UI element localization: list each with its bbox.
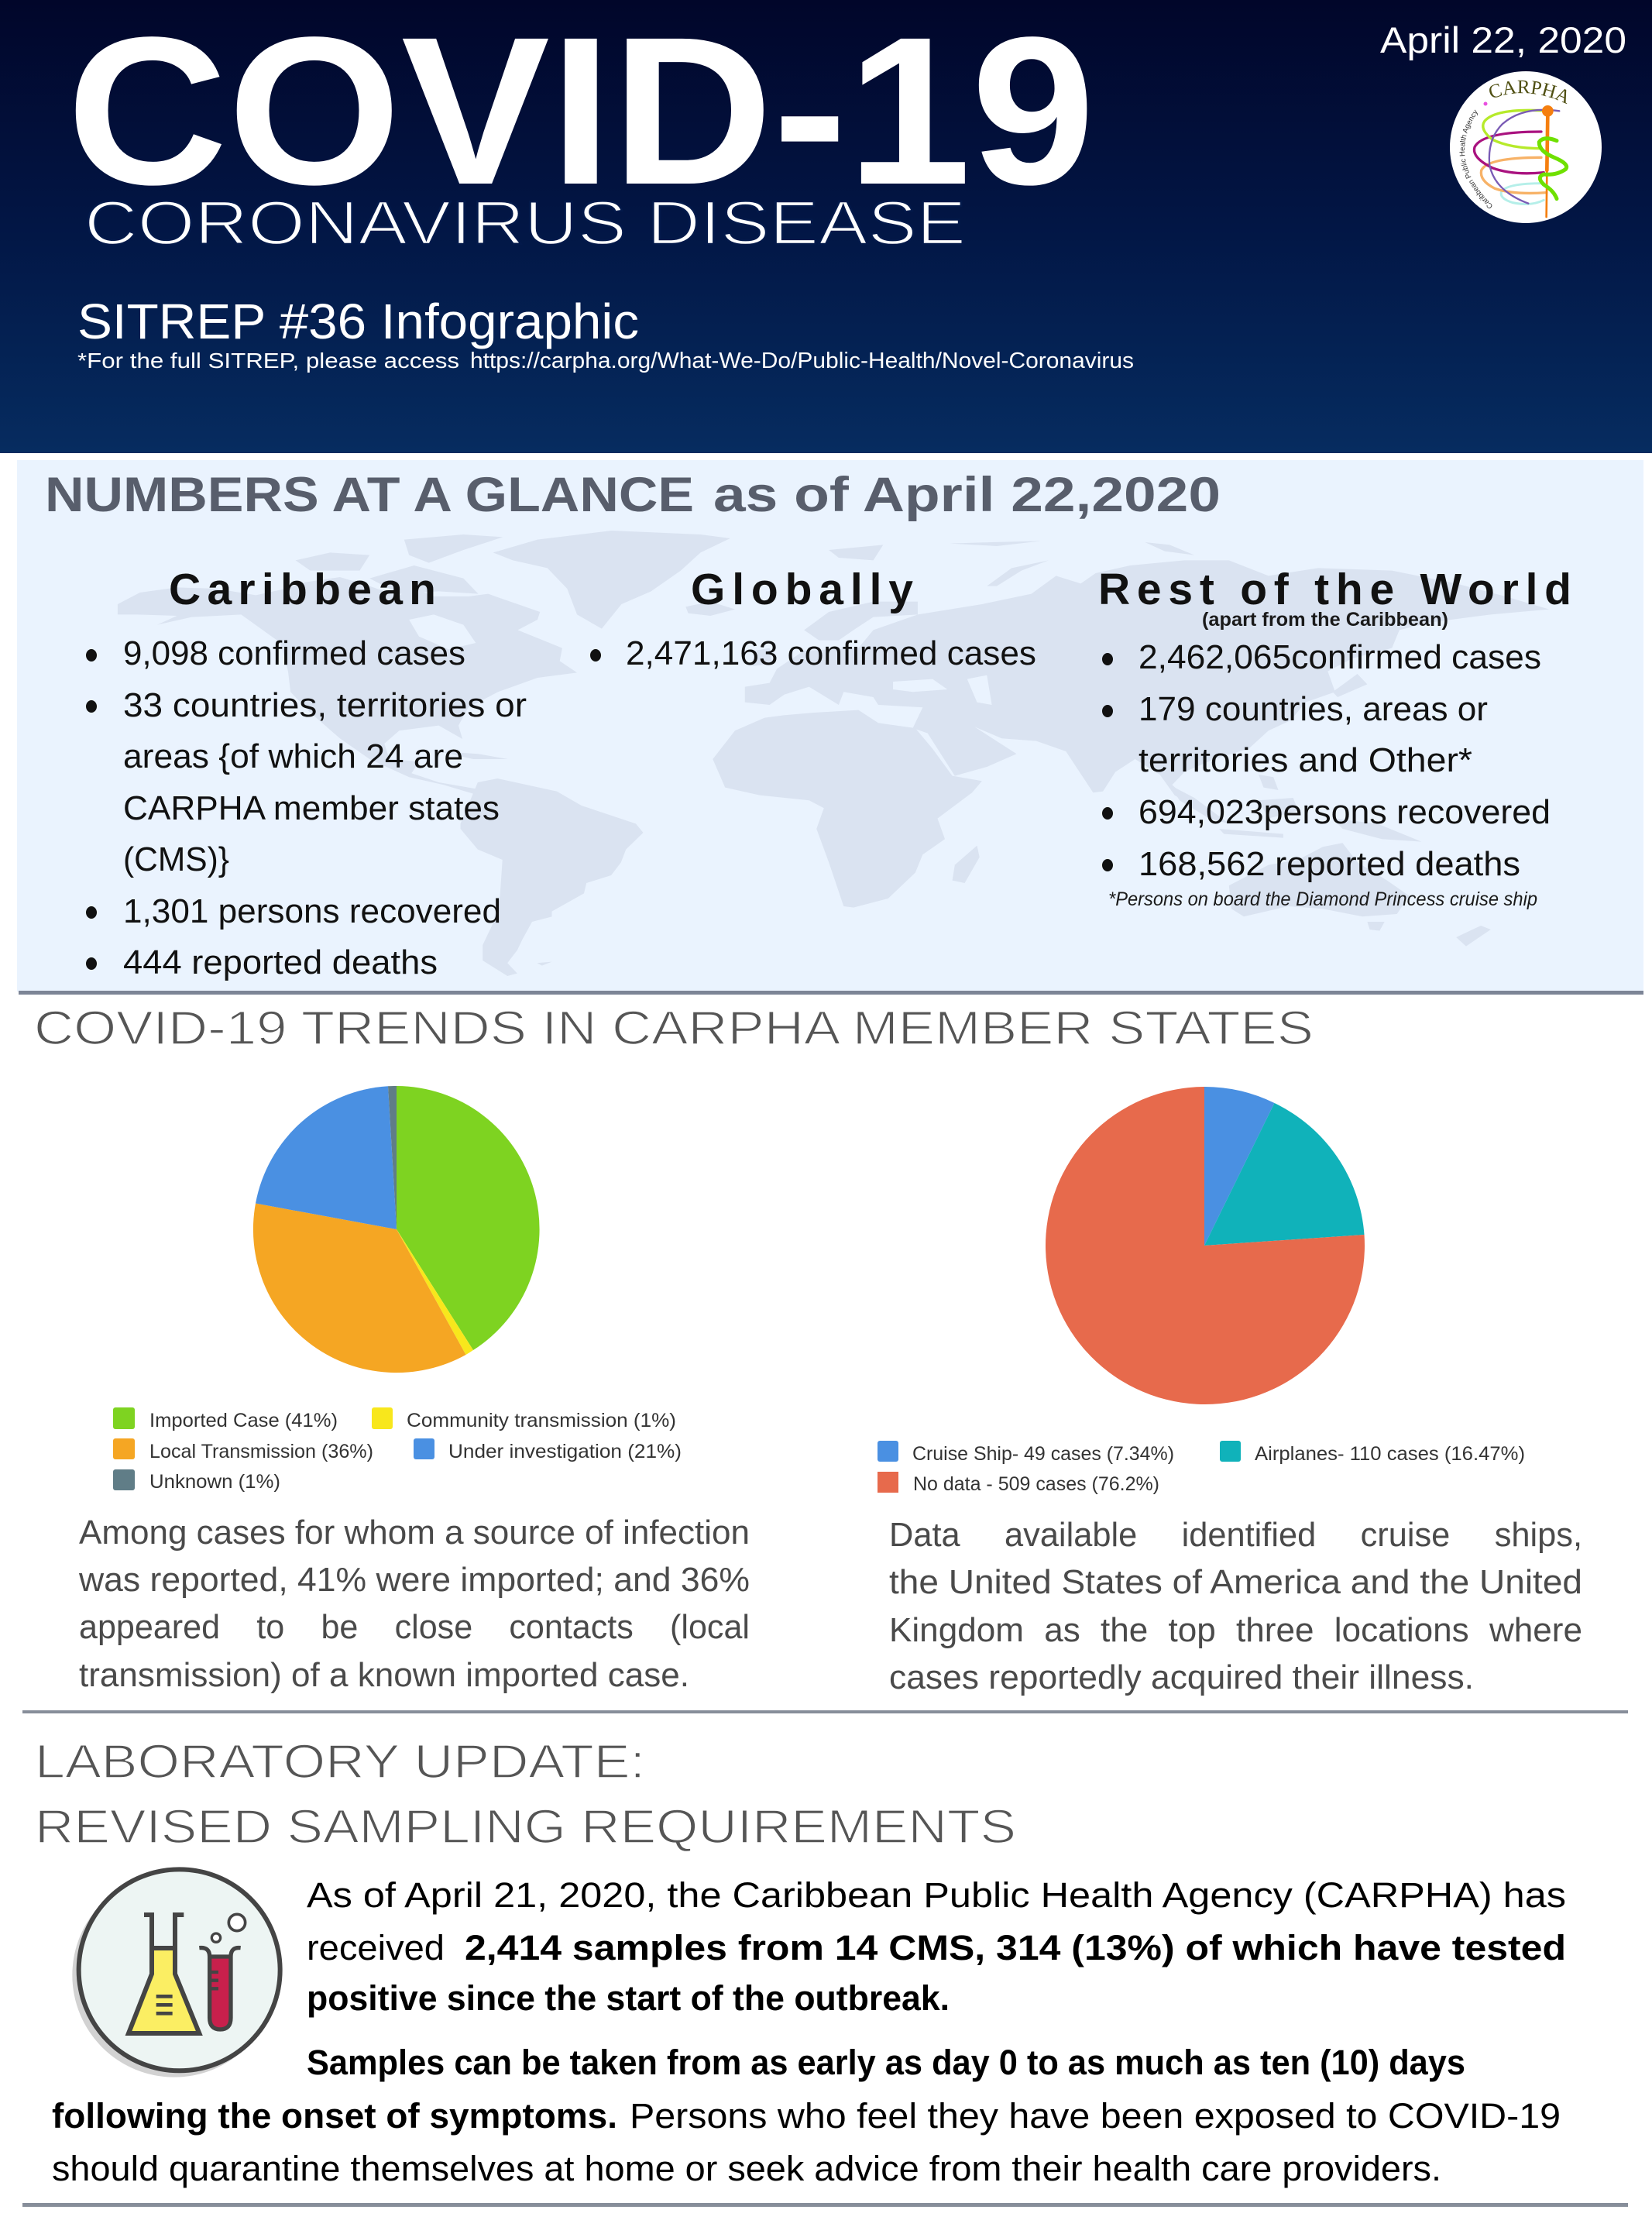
- column: Globally: [590, 565, 1036, 672]
- legend: location of acquisition: Cruise Ship- 49 cases (7.34%): [912, 1443, 1174, 1465]
- text block: source of infection summary: appeared to be close contacts (local: [79, 1608, 750, 1646]
- heading: laboratory update: REVISED SAMPLING REQUIREMENTS: [35, 1800, 1016, 1853]
- column: Globally: 2,471,163 confirmed cases: [626, 634, 1036, 672]
- text block: laboratory update: Samples can be taken from as early as day 0 to as much as ten (10) days: [307, 2043, 1465, 2082]
- text block: laboratory update: positive since the start of the outbreak.: [307, 1978, 950, 2018]
- heading: numbers at a glance: NUMBERS AT A GLANCE: [45, 468, 694, 522]
- column: Rest of the World: 168,562 reported deaths: [1139, 845, 1520, 883]
- header banner: [0, 0, 1652, 453]
- column: Rest of the World: (apart from the Caribbean): [1202, 609, 1448, 631]
- pie chart: location of acquisition: [1046, 1087, 1365, 1404]
- column: Caribbean: 444 reported deaths: [123, 943, 438, 981]
- text block: location of acquisition summary: cases reportedly acquired their illness.: [889, 1658, 1474, 1696]
- heading: numbers at a glance: [45, 468, 1221, 522]
- legend: location of acquisition: Airplanes- 110 cases (16.47%): [1255, 1443, 1525, 1465]
- column: Rest of the World: [1098, 565, 1571, 910]
- text block: source of infection summary: transmission) of a known imported case.: [79, 1656, 689, 1694]
- icon: CARPHA logo: CARPHA: [1489, 81, 1568, 104]
- text block: laboratory update: should quarantine themselves at home or seek advice from their health care providers.: [52, 2149, 1441, 2188]
- text block: source of infection summary: Among cases for whom a source of infection: [79, 1514, 750, 1552]
- date: April 22, 2020: [1380, 19, 1626, 60]
- legend: source of infection: Under investigation (21%): [448, 1441, 682, 1462]
- heading: numbers at a glance: as of April 22,2020: [713, 468, 1221, 522]
- panel: numbers at a glance: [17, 460, 1643, 995]
- column: Caribbean: (CMS)}: [123, 840, 229, 878]
- icon: CARPHA logo: [1450, 71, 1602, 223]
- title: COVID-19: [67, 0, 1095, 229]
- heading: trends in CARPHA member states: COVID-19 TRENDS IN CARPHA MEMBER STATES: [34, 1002, 1314, 1054]
- legend: source of infection: Community transmission (1%): [407, 1410, 676, 1431]
- column: Rest of the World: territories and Other*: [1139, 741, 1472, 779]
- column: Caribbean: Caribbean: [169, 565, 436, 614]
- column: Rest of the World: 179 countries, areas or: [1139, 690, 1488, 728]
- text block: laboratory update: [52, 1875, 1566, 2188]
- text block: location of acquisition summary: Kingdom as the top three locations where: [889, 1611, 1582, 1649]
- heading: laboratory update: [35, 1735, 1016, 1853]
- column: Caribbean: 9,098 confirmed cases: [123, 634, 465, 672]
- column: Rest of the World: *Persons on board the Diamond Princess cruise ship: [1108, 888, 1537, 910]
- column: Caribbean: areas {of which 24 are: [123, 737, 463, 775]
- subtitle: CORONAVIRUS DISEASE: [84, 188, 966, 257]
- text block: laboratory update: received: [307, 1928, 445, 1967]
- text block: laboratory update: As of April 21, 2020, the Caribbean Public Health Agency (CARPHA) has: [307, 1875, 1566, 1915]
- column: Globally: Globally: [691, 565, 913, 614]
- legend: location of acquisition: [878, 1441, 1525, 1495]
- legend: source of infection: Unknown (1%): [149, 1471, 280, 1493]
- text block: laboratory update: Persons who feel they have been exposed to COVID-19: [630, 2096, 1561, 2136]
- column: Caribbean: [86, 565, 527, 981]
- column: Caribbean: 33 countries, territories or: [123, 686, 527, 724]
- world map background: [118, 531, 1549, 976]
- column: Caribbean: CARPHA member states: [123, 789, 500, 827]
- text block: location of acquisition summary: Data available identified cruise ships,: [889, 1516, 1582, 1554]
- text block: source of infection summary: [78, 1514, 750, 1694]
- text block: laboratory update: following the onset of symptoms.: [52, 2096, 617, 2136]
- icon: laboratory flask and test tube: [72, 1869, 280, 2077]
- column: Rest of the World: Rest of the World: [1098, 565, 1571, 614]
- column: Rest of the World: 2,462,065confirmed cases: [1139, 638, 1541, 676]
- sitrep note: *For the full SITREP, please access: [77, 349, 459, 373]
- icon: CARPHA logo: Caribbean Public Health Agency: [1459, 110, 1492, 208]
- legend: source of infection: Imported Case (41%): [149, 1410, 338, 1431]
- heading: laboratory update: LABORATORY UPDATE:: [35, 1735, 645, 1788]
- legend: source of infection: [113, 1407, 682, 1493]
- column: Caribbean: 1,301 persons recovered: [123, 892, 501, 930]
- legend: location of acquisition: No data - 509 cases (76.2%): [913, 1473, 1159, 1495]
- text block: source of infection summary: was reported, 41% were imported; and 36%: [78, 1561, 750, 1599]
- sitrep heading: SITREP #36 Infographic: [77, 294, 639, 349]
- text block: laboratory update: 2,414 samples from 14 CMS, 314 (13%) of which have tested: [465, 1928, 1566, 1967]
- sitrep url: https://carpha.org/What-We-Do/Public-Health/Novel-Coronavirus: [470, 349, 1134, 373]
- legend: source of infection: Local Transmission (36%): [149, 1441, 373, 1462]
- text block: location of acquisition summary: the United States of America and the United: [889, 1563, 1582, 1601]
- column: Rest of the World: 694,023persons recovered: [1139, 793, 1551, 831]
- pie chart: source of infection: [253, 1086, 540, 1373]
- text block: location of acquisition summary: [889, 1516, 1582, 1696]
